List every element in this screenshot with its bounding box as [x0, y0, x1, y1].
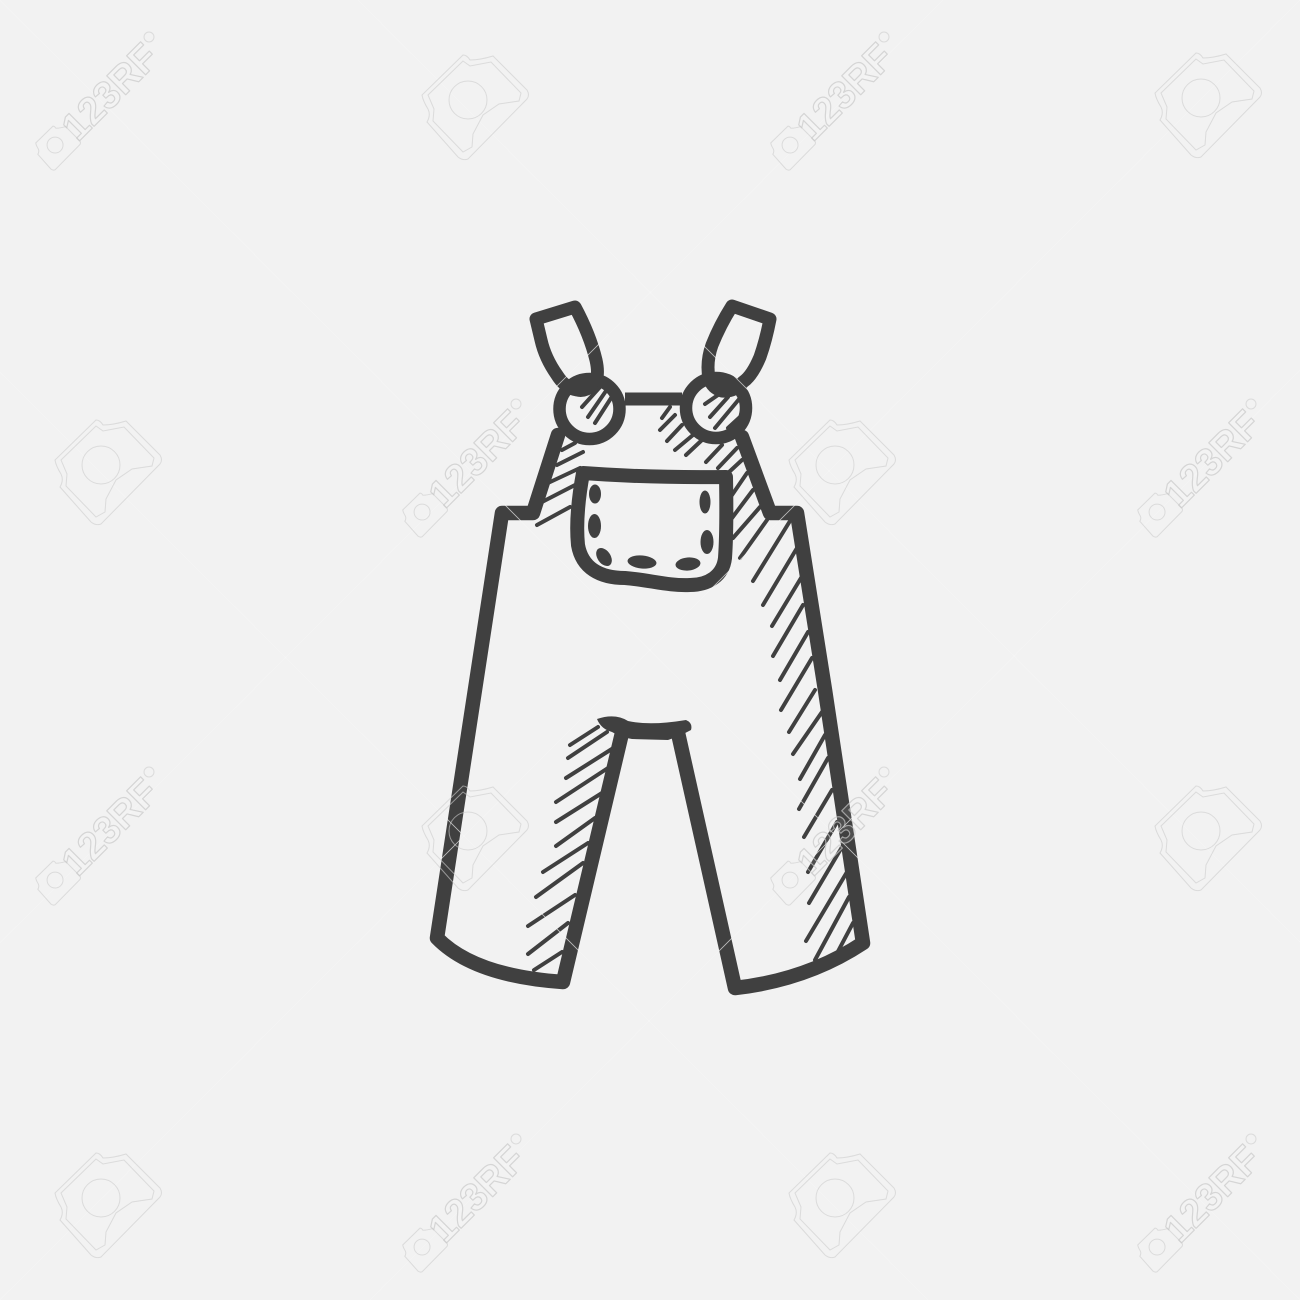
watermark logo 5: 123RF: [54, 771, 167, 884]
watermark egg 4: [789, 420, 896, 525]
right leg and bib outline: [678, 437, 863, 988]
right button: [686, 378, 746, 438]
watermark logo 7: 123RF: [421, 1138, 534, 1251]
watermark logo 4: 123RF: [1156, 403, 1269, 516]
pocket stitches: [588, 484, 714, 572]
watermark egg 6: [1155, 786, 1262, 891]
bib pocket: [577, 473, 726, 585]
watermark egg 2: [1155, 53, 1262, 158]
icon: overalls: [437, 306, 863, 988]
watermark egg 1: [422, 55, 528, 160]
right strap: [708, 306, 770, 391]
watermark egg 7: [55, 1153, 162, 1258]
watermark logo 8: 123RF: [1156, 1138, 1269, 1251]
left leg and bib outline: [437, 435, 622, 982]
watermark logo 1: 123RF: [54, 36, 167, 149]
watermark logo 2: 123RF: [789, 36, 902, 149]
left button: [560, 379, 620, 439]
watermark logo 3: 123RF: [421, 403, 534, 516]
watermark egg 5: [422, 786, 528, 891]
watermark egg 3: [55, 420, 162, 525]
left strap: [536, 307, 597, 390]
watermark egg 8: [789, 1153, 896, 1258]
bib top edge: [625, 392, 682, 406]
crotch seam: [597, 716, 691, 740]
watermark logo 6: 123RF: [789, 771, 902, 884]
shading hatches: [528, 387, 853, 970]
